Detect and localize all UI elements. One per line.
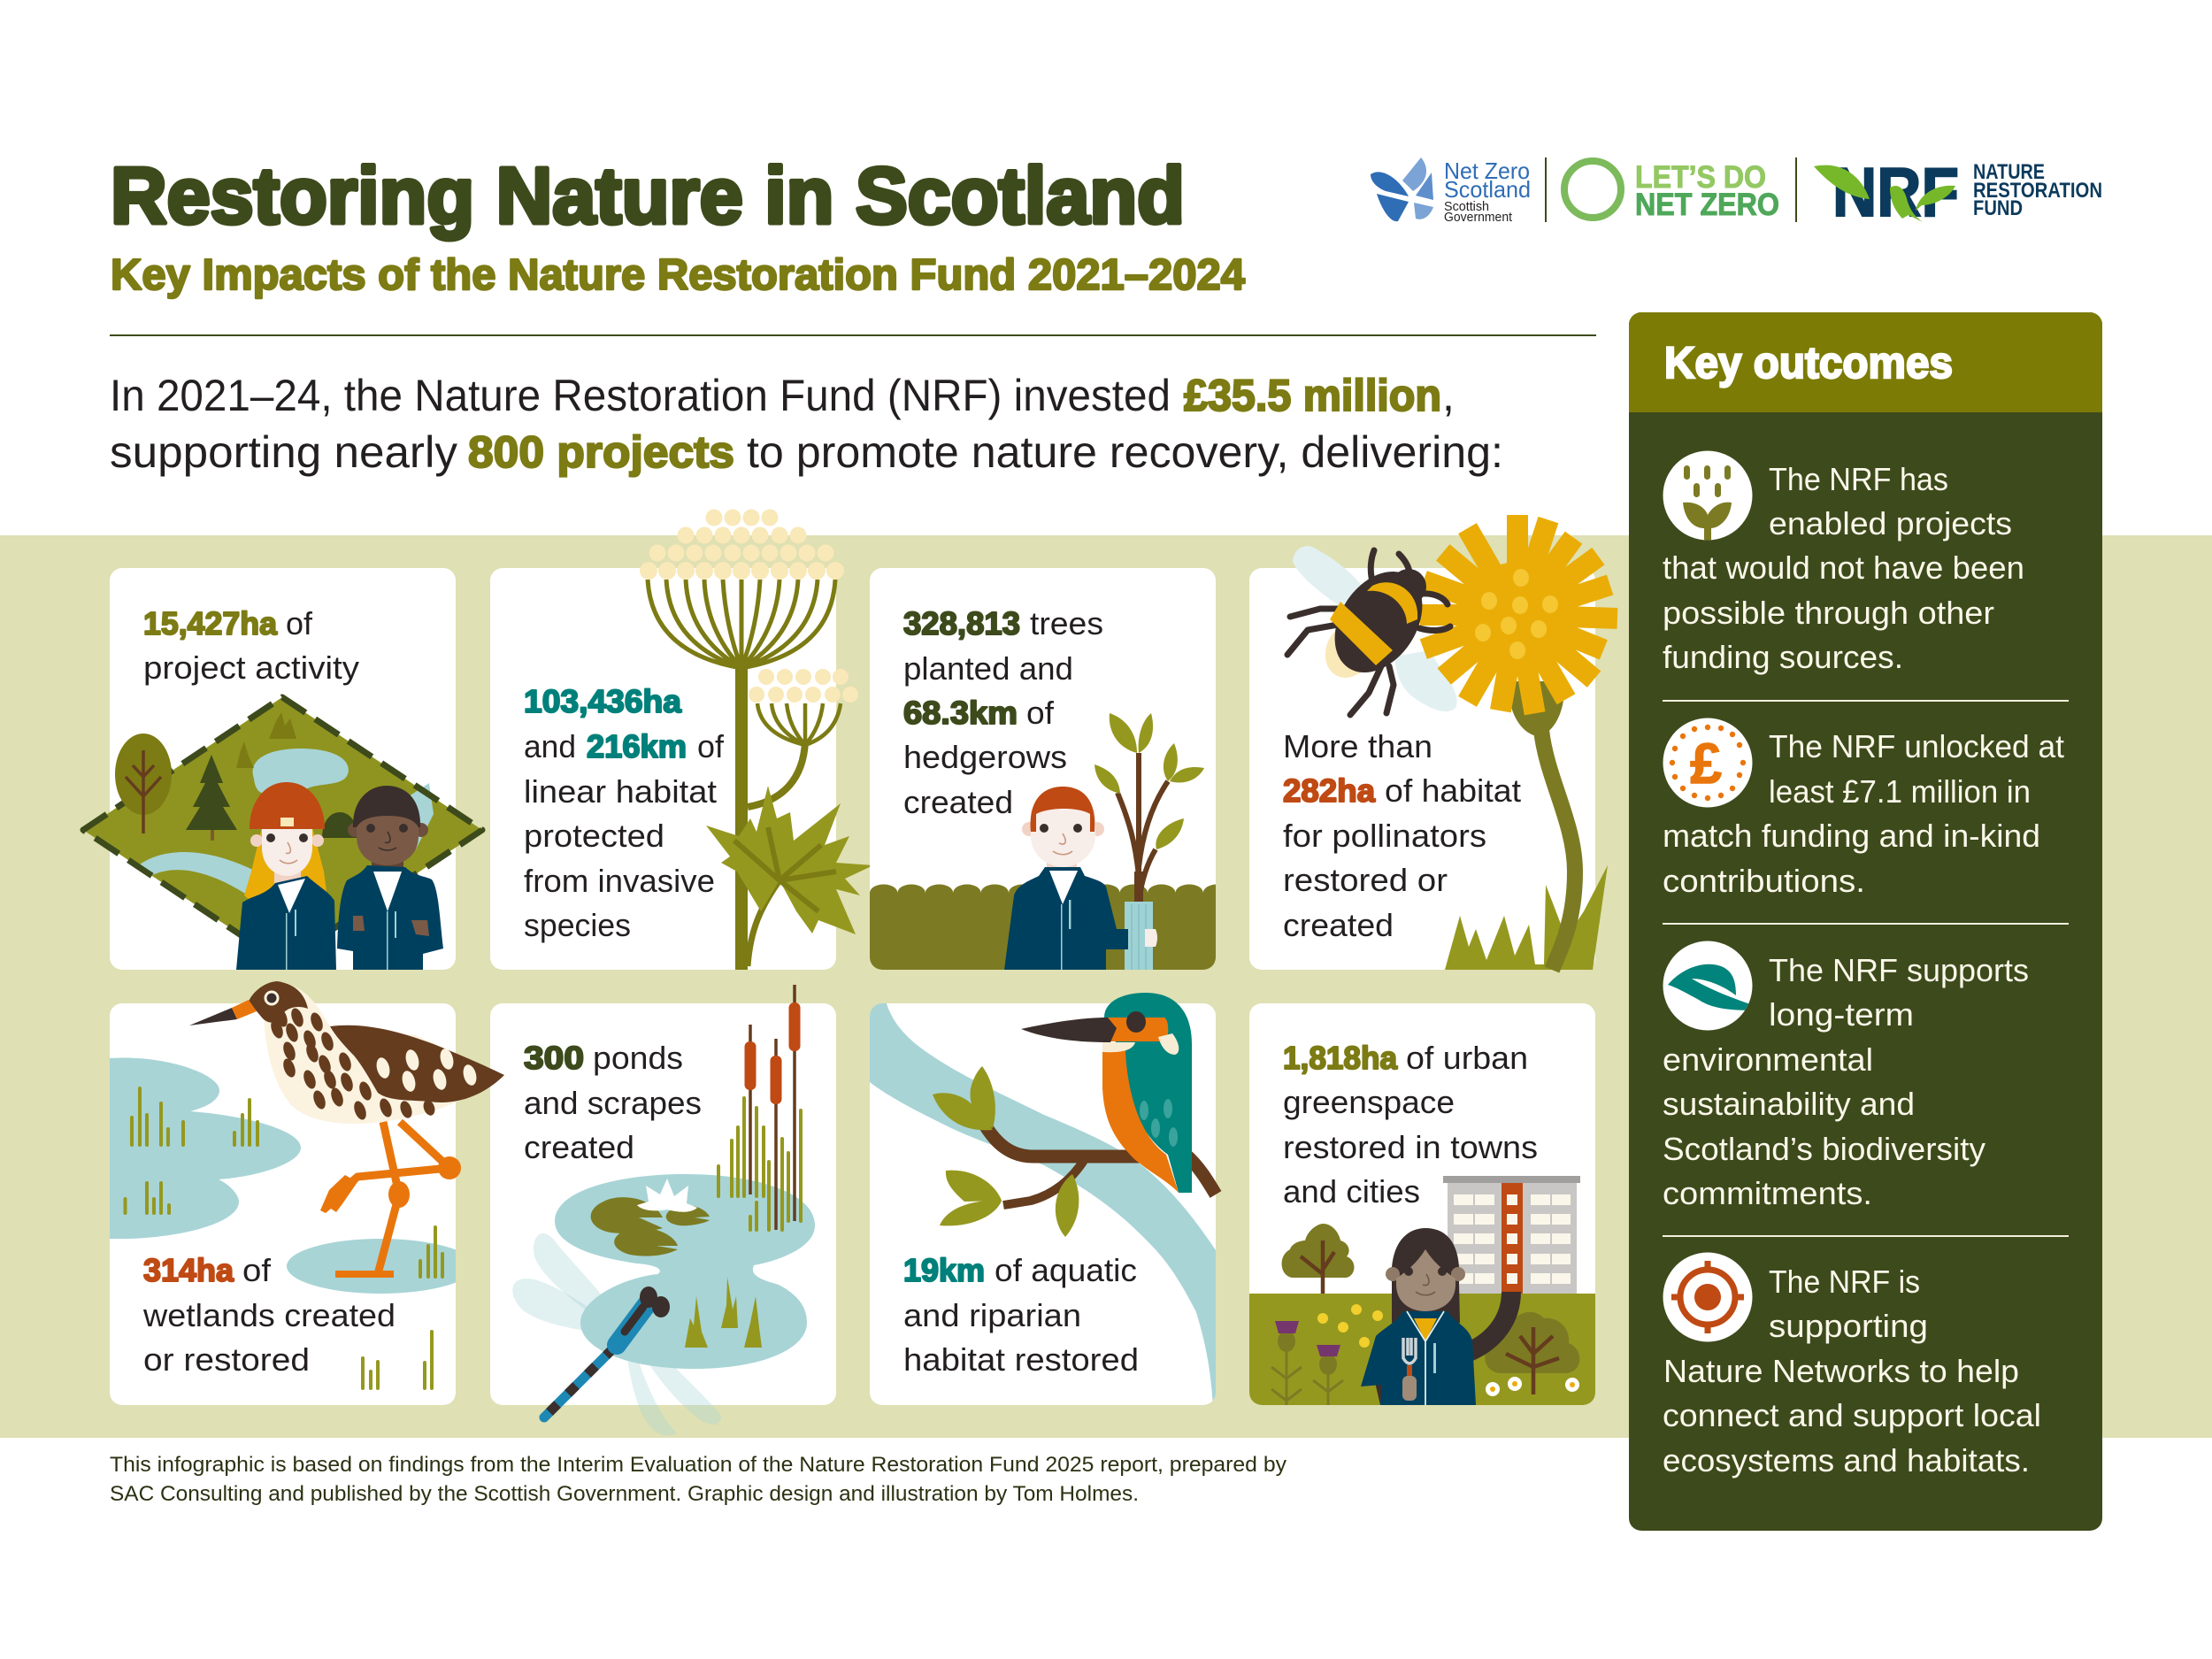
text: outcome two: least £7.1 million in [1769, 773, 2031, 810]
intro paragraph: supporting nearly [110, 427, 457, 477]
text: linear habitat protected: linear habitat [524, 773, 717, 810]
illustration: park ground [1249, 1294, 1595, 1407]
text: outcome four [1663, 1263, 2041, 1479]
text: 15,427ha of project activity: 15,427ha [143, 605, 278, 641]
panel: ponds card [490, 985, 836, 1405]
icon: target [1663, 1253, 1752, 1341]
illustration: woman with hand fork [1361, 1228, 1511, 1405]
panel: project activity card [83, 568, 482, 970]
illustration: dragonfly [512, 1233, 721, 1436]
text: wetlands created or restored: or restored [143, 1341, 310, 1378]
text: outcome three [1663, 952, 2029, 1211]
illustration: hogweed plant [640, 510, 873, 970]
text: pollinator habitat: of habitat [1385, 772, 1521, 809]
text: ponds and scrapes created: ponds [593, 1040, 683, 1076]
text: ponds and scrapes created [524, 1040, 702, 1165]
illustration: river [870, 1003, 1216, 1407]
text: outcome four: connect and support local [1663, 1397, 2041, 1433]
text: outcome three: environmental [1663, 1041, 1873, 1078]
logo: Net Zero Scotland: Scotland [1444, 176, 1531, 203]
text: pollinator habitat: restored or [1283, 862, 1448, 898]
text: outcome one: enabled projects [1769, 505, 2012, 541]
illustration: dandelion flower [1420, 515, 1617, 715]
intro paragraph: , [1442, 371, 1455, 420]
text: outcome three: Scotland’s biodiversity [1663, 1131, 1985, 1167]
text: pollinator habitat: created [1283, 907, 1394, 943]
text: outcome three: sustainability and [1663, 1086, 1915, 1122]
intro paragraph: In 2021–24, the Nature Restoration Fund (NRF) invested [110, 371, 1171, 420]
logo: Let's Do Net Zero [1564, 160, 1779, 222]
text: linear habitat protected: species [524, 907, 631, 943]
text: outcome two: contributions. [1663, 863, 1865, 899]
text: aquatic and riparian habitat: habitat restored [903, 1341, 1139, 1378]
heading: key outcomes: Key outcomes [1664, 338, 1953, 388]
illustration: grass [1445, 865, 1608, 970]
illustration: bulrushes and reeds [718, 985, 801, 1230]
panel: urban greenspace card [1249, 1003, 1595, 1407]
footnote: SAC Consulting and published by the Scottish Government. Graphic design and illustration by Tom Holmes. [110, 1482, 1139, 1506]
intro paragraph: 800 projects [468, 427, 734, 477]
subtitle: Key Impacts of the Nature Restoration Fund 2021–2024 [111, 251, 1245, 299]
text: outcome four: Nature Networks to help [1663, 1353, 2019, 1389]
logo: Net Zero Scotland: Scottish [1444, 199, 1489, 214]
illustration: left tree [1282, 1224, 1354, 1294]
text: wetlands created or restored [142, 1252, 396, 1378]
text: outcome one: that would not have been [1663, 549, 2024, 586]
text: trees planted and hedgerows created: created [903, 784, 1013, 820]
text: 15,427ha of project activity [143, 605, 359, 686]
logo: Nature Restoration Fund [1814, 153, 2102, 231]
logo: Net Zero Scotland [1371, 157, 1531, 225]
text: linear habitat protected: 103,436ha [524, 683, 682, 719]
illustration: man with crossed arms [337, 786, 443, 970]
panel: aquatic habitat card [870, 993, 1216, 1407]
illustration: thistles and flowers [1271, 1304, 1579, 1405]
background band [0, 535, 2212, 1438]
text: pollinator habitat: for pollinators [1283, 818, 1486, 854]
text: outcome one: possible through other [1663, 595, 1994, 631]
logo: Nature Restoration Fund: FUND [1973, 196, 2023, 220]
text: urban greenspace: restored in towns [1283, 1129, 1538, 1165]
text: ponds and scrapes created: created [524, 1129, 634, 1165]
text: outcome three: long-term [1769, 996, 1914, 1033]
illustration: bee wings [1293, 546, 1457, 711]
icon: pound coin: £ [1690, 732, 1722, 795]
text: trees planted and hedgerows created: planted and [903, 650, 1073, 687]
text: outcome one [1663, 461, 2024, 675]
text: outcome two [1663, 728, 2064, 899]
panel: trees card [870, 568, 1231, 970]
illustration: sapling in tube [1094, 713, 1204, 970]
text: linear habitat protected [524, 683, 725, 943]
illustration: wetland pools and reeds [110, 1058, 474, 1388]
panel: key outcomes [1629, 312, 2102, 1531]
logo: Let's Do Net Zero: NET ZERO [1635, 188, 1779, 222]
text: aquatic and riparian habitat: of aquatic [995, 1252, 1137, 1288]
illustration: site map diamond [83, 697, 482, 963]
text: 15,427ha of project activity: of [286, 605, 313, 641]
text: trees planted and hedgerows created: 328,813 [903, 605, 1020, 641]
text: ponds and scrapes created: and scrapes [524, 1085, 702, 1121]
text: linear habitat protected: of [697, 728, 725, 764]
text: linear habitat protected: 216km [587, 728, 687, 764]
text: aquatic and riparian habitat: 19km [903, 1252, 985, 1288]
icon: pound coin [1663, 718, 1752, 807]
text: urban greenspace: and cities [1283, 1173, 1420, 1210]
text: linear habitat protected: from invasive [524, 863, 715, 899]
illustration: branch and leaves [933, 1066, 1216, 1237]
intro paragraph [110, 371, 1503, 477]
logo: Net Zero Scotland: Government [1444, 210, 1513, 225]
footnote: This infographic is based on findings from the Interim Evaluation of the Nature Restoration Fund 2025 report, prepared by [110, 1453, 1287, 1477]
text: outcome two: The NRF unlocked at [1769, 728, 2064, 764]
text: outcome three: commitments. [1663, 1175, 1872, 1211]
icon: leaf [1663, 941, 1756, 1030]
text: outcome four: ecosystems and habitats. [1663, 1442, 2030, 1479]
logo: Nature Restoration Fund: RESTORATION [1973, 179, 2102, 203]
text: pollinator habitat: 282ha [1283, 772, 1376, 809]
logo: Net Zero Scotland: Net Zero [1444, 157, 1530, 184]
text: urban greenspace: greenspace [1283, 1084, 1455, 1120]
panel: pollinators card [1249, 515, 1617, 970]
text: wetlands created or restored: 314ha [143, 1252, 234, 1288]
intro paragraph: to promote nature recovery, delivering: [747, 427, 1503, 477]
title: Restoring Nature in Scotland [111, 152, 1185, 241]
text: trees planted and hedgerows created: 68.3km [903, 695, 1018, 731]
illustration: redshank bird [189, 981, 504, 1278]
text: outcome two: match funding and in-kind [1663, 818, 2040, 854]
text: trees planted and hedgerows created: of [1026, 695, 1055, 731]
text: ponds and scrapes created: 300 [524, 1040, 584, 1076]
panel: invasive species card [490, 510, 873, 970]
text: urban greenspace: of urban [1406, 1040, 1528, 1076]
illustration: bumblebee [1287, 550, 1450, 715]
logo: Nature Restoration Fund: NATURE [1973, 160, 2045, 184]
text: linear habitat protected: protected [524, 818, 664, 854]
illustration: kingfisher [1021, 993, 1192, 1193]
illustration: dandelion stem [1509, 681, 1575, 970]
text: 15,427ha of project activity: project activity [143, 649, 359, 686]
text: outcome one: The NRF has [1769, 461, 1948, 497]
text: outcome one: funding sources. [1663, 639, 1903, 675]
header rule [110, 334, 1596, 336]
text: pollinator habitat: More than [1283, 728, 1432, 764]
text: aquatic and riparian habitat: and riparian [903, 1297, 1081, 1333]
text: outcome four: The NRF is [1769, 1263, 1920, 1300]
text: wetlands created or restored: of [242, 1252, 272, 1288]
panel: wetlands card [110, 1003, 474, 1405]
illustration: pond [555, 1174, 815, 1369]
text: aquatic and riparian habitat [903, 1252, 1139, 1378]
footnote [110, 1453, 1287, 1506]
text: pollinator habitat [1283, 728, 1521, 943]
text: urban greenspace: 1,818ha [1283, 1040, 1398, 1076]
illustration: man with red hair [1004, 787, 1128, 970]
text: outcome three: The NRF supports [1769, 952, 2029, 988]
text: trees planted and hedgerows created: hedgerows [903, 739, 1067, 775]
illustration: hedgerow [870, 885, 1231, 970]
illustration: bush [1485, 1312, 1579, 1394]
logo: Nature Restoration Fund: NRF [1832, 153, 1959, 231]
text: linear habitat protected: and [524, 728, 576, 764]
illustration: apartment block [1443, 1176, 1580, 1294]
text: trees planted and hedgerows created [903, 605, 1103, 820]
illustration: water plants [685, 1277, 762, 1348]
logo: Let's Do Net Zero: LET’S DO [1635, 160, 1766, 195]
illustration: water lily [591, 1179, 710, 1256]
icon: seedling [1663, 451, 1752, 541]
illustration: woman in hat [236, 782, 336, 970]
text: outcome four: supporting [1769, 1308, 1928, 1344]
text: urban greenspace [1283, 1040, 1538, 1210]
text: wetlands created or restored: wetlands created [142, 1297, 396, 1333]
intro paragraph: £35.5 million [1184, 371, 1441, 420]
text: trees planted and hedgerows created: trees [1030, 605, 1103, 641]
